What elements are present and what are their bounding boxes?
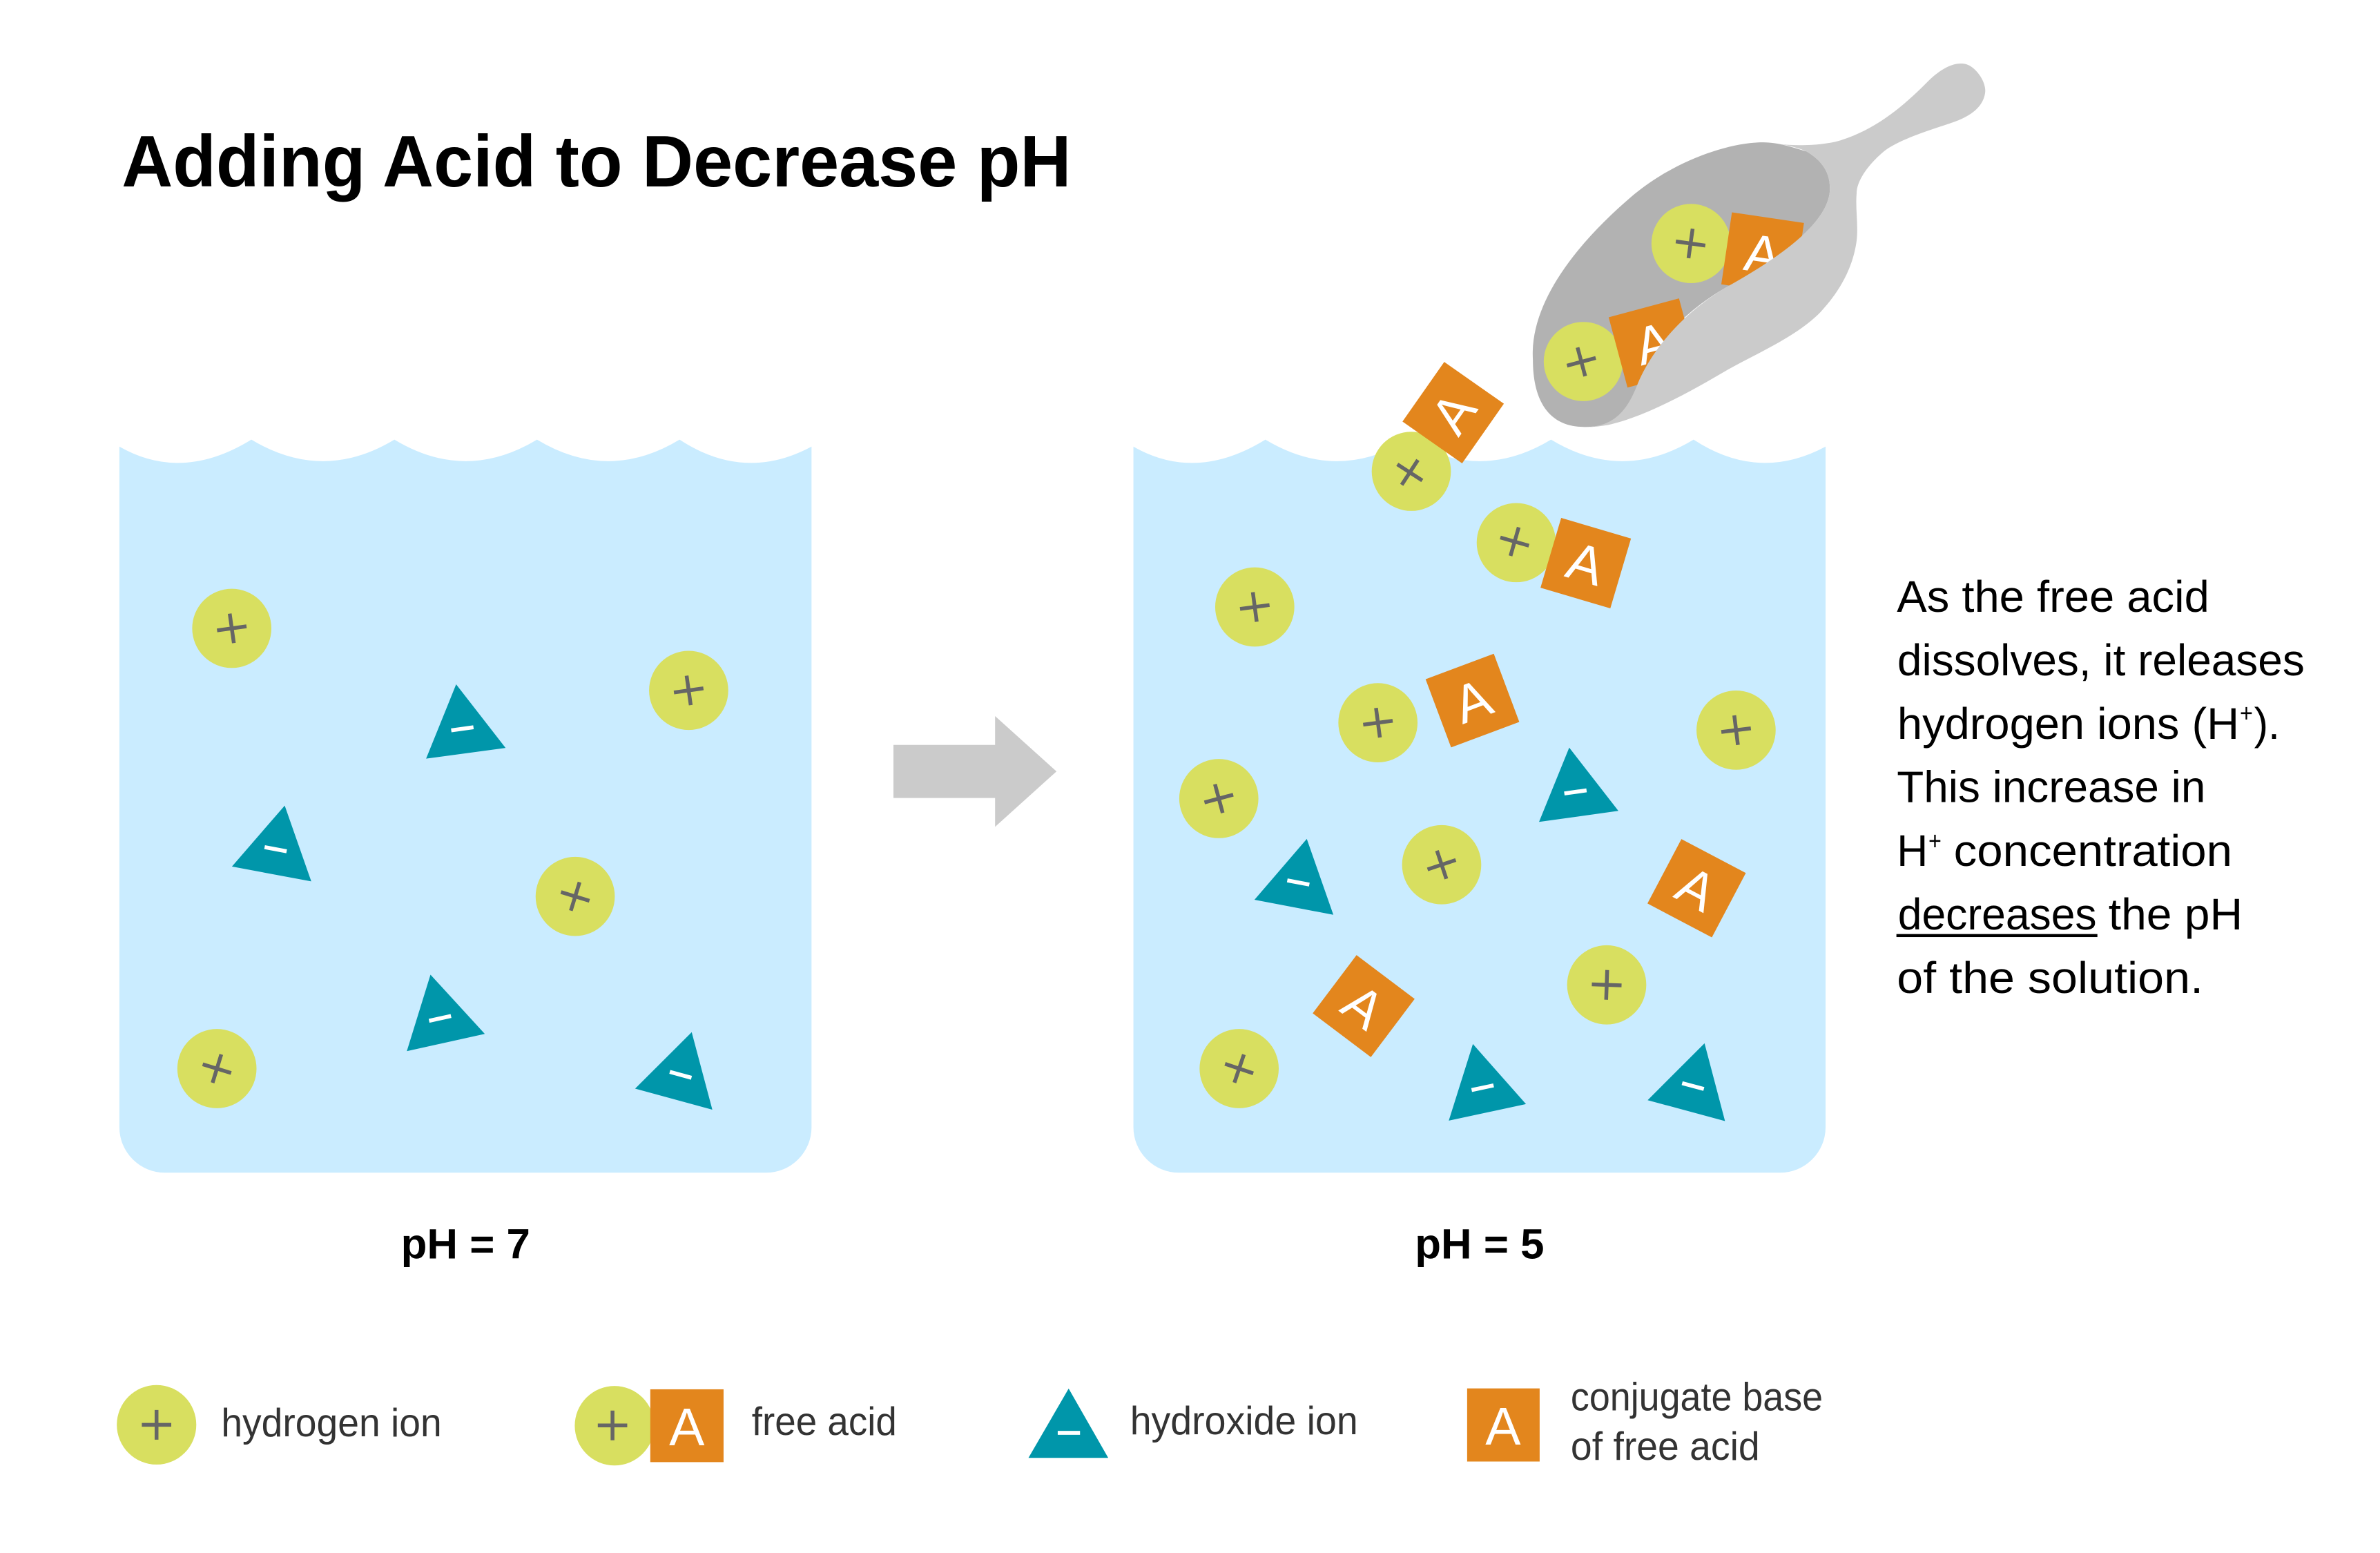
hydrogen ion [1696,691,1776,770]
label: pH 5: pH = 5 [1415,1221,1544,1269]
hydroxide ion [1647,1043,1725,1121]
text block: explanation: hydrogen ions (H [1897,699,2239,749]
conjugate base [1313,955,1415,1057]
text block: explanation: As the free acid [1897,572,2209,621]
free acid falling from scoop: A [1420,381,1489,445]
conjugate base [1647,839,1746,938]
text block: explanation [1897,572,2305,1003]
free acid in scoop [1544,298,1698,401]
text block: explanation: + [2240,699,2253,728]
legend icon: hydroxide ion [1029,1389,1108,1458]
hydroxide ion [635,1032,713,1110]
hydrogen ion [1402,825,1481,905]
text block: explanation: ). [2254,699,2280,749]
conjugate base: A [1446,667,1500,735]
panel: beaker at pH 7 [119,440,811,1173]
free acid dissolving in water [1477,503,1631,608]
text block: explanation: concentration [1954,826,2232,876]
hydroxide ion [1255,839,1333,915]
label: pH 7: pH = 7 [401,1221,530,1269]
hydrogen ion [1179,759,1259,838]
scoop inner bowl [1533,142,1830,427]
text block: explanation: This increase in [1897,762,2205,812]
water in beaker pH 7 [119,440,811,1173]
hydroxide ion [232,806,311,881]
legend icon: free acid [574,1386,724,1465]
legend label: conjugate base of free acid: conjugate base [1571,1376,1823,1420]
legend [117,1376,1823,1469]
hydrogen ion [1199,1029,1279,1108]
text block: explanation: the pH [2109,889,2243,939]
hydrogen ion [1567,945,1646,1025]
free acid in scoop: A [1629,311,1678,377]
text block: explanation: dissolves, it releases [1897,635,2305,685]
legend label: free acid: free acid [752,1400,897,1444]
conjugate base: A [1667,854,1726,924]
hydroxide ion [1539,748,1618,822]
free acid in scoop: A [1741,222,1785,287]
free acid in scoop [1652,204,1804,295]
hydrogen ion [177,1029,257,1108]
conjugate base [1426,654,1519,747]
legend label: hydroxide ion: hydroxide ion [1130,1399,1358,1443]
water in beaker pH 5 [1134,440,1826,1173]
free acid dissolving in water: A [1560,530,1612,597]
text block: explanation: decreases [1898,889,2097,939]
hydrogen ion [536,857,615,936]
scoop outer body and handle [1589,64,1985,427]
text block: explanation: H [1897,826,1928,876]
legend icon: conjugate base [1467,1389,1540,1462]
hydrogen ion [649,650,728,730]
panel: beaker at pH 5 [1134,440,1826,1173]
hydroxide ion [426,684,505,759]
title: Adding Acid to Decrease pH [122,122,1071,202]
hydrogen ion [1338,683,1418,762]
hydroxide ion [1449,1044,1526,1121]
free acid falling from scoop [1372,362,1504,511]
arrow [893,716,1056,827]
legend icon: hydrogen ion [117,1385,196,1465]
text block: explanation: + [1928,826,1942,855]
hydrogen ion [192,589,271,668]
legend icon: conjugate base: A [1485,1397,1521,1456]
legend label: conjugate base of free acid [1571,1376,1823,1469]
legend icon: free acid: A [669,1398,705,1457]
legend label: hydrogen ion: hydrogen ion [221,1401,442,1445]
text block: explanation: of the solution. [1897,953,2203,1003]
icon: scoop with free acid [1533,64,1985,427]
hydroxide ion [407,975,485,1051]
legend label: conjugate base of free acid: of free acid [1571,1425,1760,1469]
hydrogen ion [1215,568,1295,646]
conjugate base: A [1331,972,1395,1041]
